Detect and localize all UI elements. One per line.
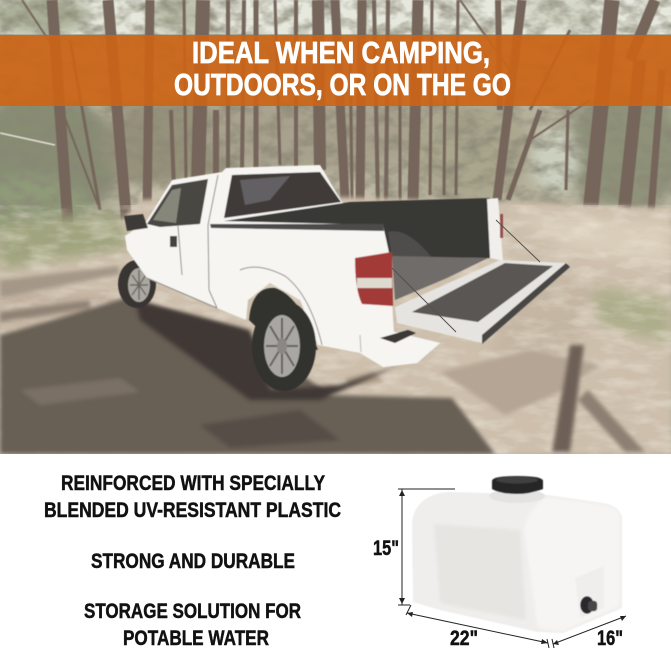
banner heading: OUTDOORS, OR ON THE GO <box>174 67 511 102</box>
feature list <box>44 472 341 650</box>
feature: UV-resistant plastic: REINFORCED WITH SPECIALLY <box>61 472 325 495</box>
feature: potable water: STORAGE SOLUTION FOR <box>84 600 301 623</box>
feature: UV-resistant plastic: BLENDED UV-RESISTANT PLASTIC <box>44 499 341 522</box>
truck body <box>124 164 394 366</box>
banner heading <box>174 35 511 102</box>
white lower panel <box>0 454 671 671</box>
tank cap <box>489 476 545 503</box>
tank outlet panel <box>575 566 604 618</box>
bed floor <box>392 256 488 300</box>
side window <box>147 179 208 227</box>
bed rail <box>210 224 384 231</box>
feature: strong and durable: STRONG AND DURABLE <box>91 550 295 573</box>
front tire <box>118 260 156 308</box>
tail light <box>355 252 393 306</box>
cab seam and door lines <box>147 175 322 345</box>
dimensions <box>373 489 626 650</box>
height label: 15" <box>373 537 399 560</box>
bumper <box>395 332 412 336</box>
truck shadow <box>135 300 400 400</box>
banner heading: IDEAL WHEN CAMPING, <box>192 35 490 70</box>
length label: 22" <box>450 627 478 650</box>
photo: truck in a forest <box>0 0 671 454</box>
rear window <box>224 172 341 218</box>
bed back wall <box>224 198 490 258</box>
pickup truck <box>118 165 570 400</box>
tank spigot <box>580 596 597 614</box>
tailgate <box>395 260 568 343</box>
feature: UV-resistant plastic <box>44 472 341 522</box>
tailgate post <box>487 198 503 261</box>
width label: 16" <box>597 627 623 650</box>
feature: potable water: POTABLE WATER <box>123 627 269 650</box>
tank body <box>412 492 622 633</box>
forest background <box>0 0 671 454</box>
water tank <box>412 476 622 633</box>
feature: potable water <box>84 600 301 650</box>
rear tire <box>249 288 318 391</box>
orange banner <box>0 35 671 106</box>
ground <box>0 195 671 454</box>
tank front face <box>434 524 526 620</box>
mirror <box>124 214 148 231</box>
